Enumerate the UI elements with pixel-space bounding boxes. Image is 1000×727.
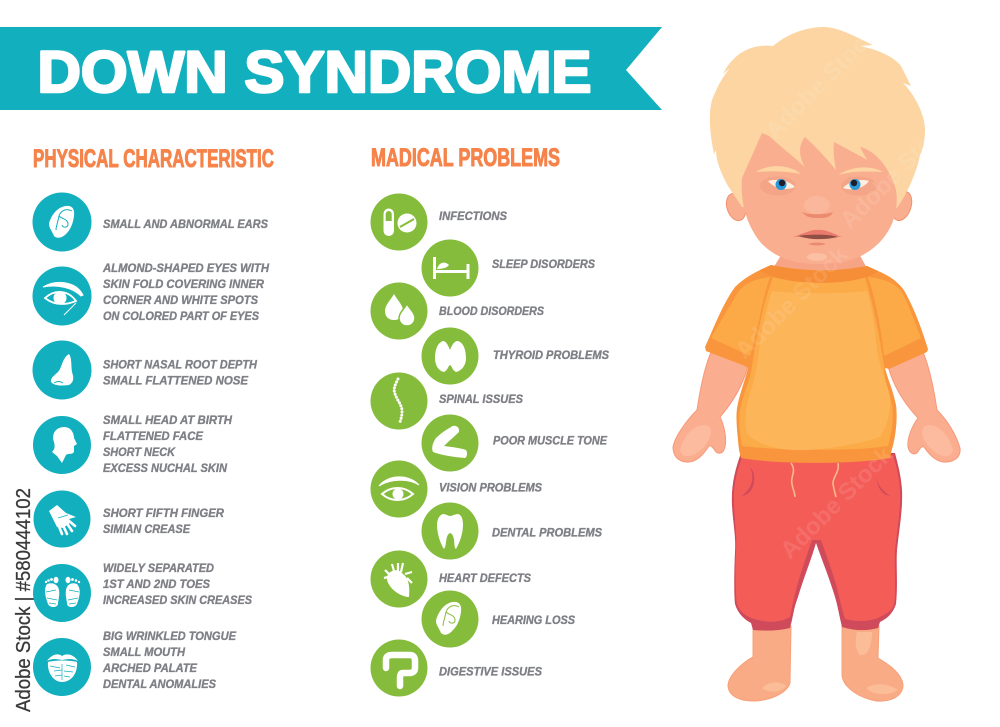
label: SHORT FIFTH FINGER bbox=[103, 506, 224, 520]
boy: eyebrows bbox=[756, 166, 883, 175]
label: DENTAL ANOMALIES bbox=[103, 677, 217, 691]
boy: drawstrings bbox=[791, 463, 838, 497]
label: SMALL AND ABNORMAL EARS bbox=[103, 217, 269, 231]
row: head bbox=[33, 413, 233, 475]
boy: nose bbox=[802, 196, 833, 218]
icon: flexed arm bbox=[422, 414, 478, 472]
panel: physical characteristic bbox=[32, 145, 274, 696]
watermark: Adobe Stock bbox=[775, 441, 898, 564]
row: sleep bbox=[422, 240, 596, 296]
label: CORNER AND WHITE SPOTS bbox=[103, 293, 259, 307]
row: thyroid bbox=[422, 328, 610, 384]
boy: legs and feet bbox=[728, 626, 903, 701]
row: blood bbox=[370, 282, 545, 340]
label: INCREASED SKIN CREASES bbox=[103, 593, 253, 607]
label: ARCHED PALATE bbox=[102, 661, 198, 675]
row: infections bbox=[370, 194, 508, 250]
title: DOWN SYNDROME bbox=[38, 40, 592, 105]
stock credit: Adobe Stock | #580444102 bbox=[12, 488, 35, 712]
label bbox=[102, 261, 270, 323]
boy: hair bbox=[710, 27, 925, 208]
row: eyes bbox=[32, 261, 270, 326]
icon: thyroid bbox=[422, 328, 478, 384]
boy: arms and hands bbox=[673, 350, 960, 462]
boy: mouth bbox=[793, 230, 842, 261]
label: SPINAL ISSUES bbox=[439, 392, 524, 406]
label: SMALL HEAD AT BIRTH bbox=[103, 413, 233, 427]
boy: shirt body highlight bbox=[746, 291, 890, 450]
icon: feet bbox=[33, 564, 91, 622]
label: ON COLORED PART OF EYES bbox=[103, 309, 260, 323]
row: hearing bbox=[422, 590, 576, 648]
label: SMALL MOUTH bbox=[103, 645, 186, 659]
icon: drops bbox=[370, 282, 428, 340]
icon: hand bbox=[34, 490, 90, 548]
label: 1ST AND 2ND TOES bbox=[103, 577, 211, 591]
watermark bbox=[730, 21, 958, 564]
label bbox=[103, 561, 253, 607]
row: tongue bbox=[33, 629, 237, 696]
label: SIMIAN CREASE bbox=[103, 522, 191, 536]
heading: physical characteristic: PHYSICAL CHARACTERISTIC bbox=[33, 145, 274, 173]
label: FLATTENED FACE bbox=[103, 429, 204, 443]
label: ALMOND-SHAPED EYES WITH bbox=[102, 261, 270, 275]
boy: t-shirt bbox=[705, 265, 928, 463]
title banner bbox=[0, 27, 662, 110]
label: EXCESS NUCHAL SKIN bbox=[103, 461, 228, 475]
label bbox=[103, 358, 258, 388]
icon: spine bbox=[370, 372, 428, 430]
label: THYROID PROBLEMS bbox=[493, 348, 610, 362]
label bbox=[103, 506, 224, 536]
label bbox=[103, 413, 233, 475]
row: digestive bbox=[370, 640, 543, 696]
label: BLOOD DISORDERS bbox=[439, 304, 545, 318]
label: HEARING LOSS bbox=[492, 613, 576, 627]
label bbox=[102, 629, 237, 691]
icon: ear bbox=[32, 192, 92, 252]
icon: ear bbox=[422, 590, 478, 648]
icon: tongue bbox=[33, 638, 91, 696]
row: spine bbox=[370, 372, 524, 430]
row: hand bbox=[34, 490, 224, 548]
label: SMALL FLATTENED NOSE bbox=[103, 374, 249, 388]
boy: face bbox=[742, 133, 897, 264]
label: SLEEP DISORDERS bbox=[492, 257, 596, 271]
label: INFECTIONS bbox=[439, 209, 508, 223]
boy: neck bbox=[772, 252, 868, 276]
row: ears bbox=[32, 192, 269, 252]
icon: heart bbox=[370, 550, 428, 608]
panel: medical problems bbox=[370, 144, 610, 696]
row: nose bbox=[32, 340, 258, 400]
label: VISION PROBLEMS bbox=[439, 480, 543, 494]
label: SHORT NECK bbox=[103, 445, 176, 459]
row: heart bbox=[370, 550, 532, 608]
boy: shirt collar bbox=[760, 265, 878, 283]
icon: intestine bbox=[370, 640, 428, 696]
icon: nose bbox=[32, 340, 92, 400]
label: POOR MUSCLE TONE bbox=[493, 434, 608, 448]
row: vision bbox=[370, 460, 543, 518]
label: WIDELY SEPARATED bbox=[103, 561, 214, 575]
label: DENTAL PROBLEMS bbox=[492, 526, 603, 540]
icon: eye bbox=[370, 460, 428, 518]
label: SHORT NASAL ROOT DEPTH bbox=[103, 358, 258, 372]
boy: ears bbox=[723, 189, 915, 223]
heading: medical problems: MADICAL PROBLEMS bbox=[371, 144, 560, 172]
row: feet bbox=[33, 561, 253, 622]
label: DIGESTIVE ISSUES bbox=[439, 664, 543, 678]
boy: shorts bbox=[732, 453, 902, 631]
icon: bed bbox=[422, 240, 478, 296]
label: BIG WRINKLED TONGUE bbox=[103, 629, 237, 643]
icon: head profile bbox=[33, 416, 91, 474]
icon: tooth bbox=[422, 502, 478, 560]
watermark: Adobe Stock bbox=[835, 111, 958, 234]
label: SKIN FOLD COVERING INNER bbox=[103, 277, 264, 291]
icon: capsule and pill bbox=[370, 194, 428, 250]
row: dental bbox=[422, 502, 603, 560]
illustration: boy bbox=[673, 27, 960, 701]
watermark: Adobe Stock bbox=[730, 241, 853, 364]
watermark: Adobe Stock bbox=[760, 21, 883, 144]
label: HEART DEFECTS bbox=[439, 571, 532, 585]
icon: eye bbox=[32, 266, 92, 326]
row: muscle bbox=[422, 414, 608, 472]
boy: eye sockets and eyes bbox=[760, 176, 877, 196]
